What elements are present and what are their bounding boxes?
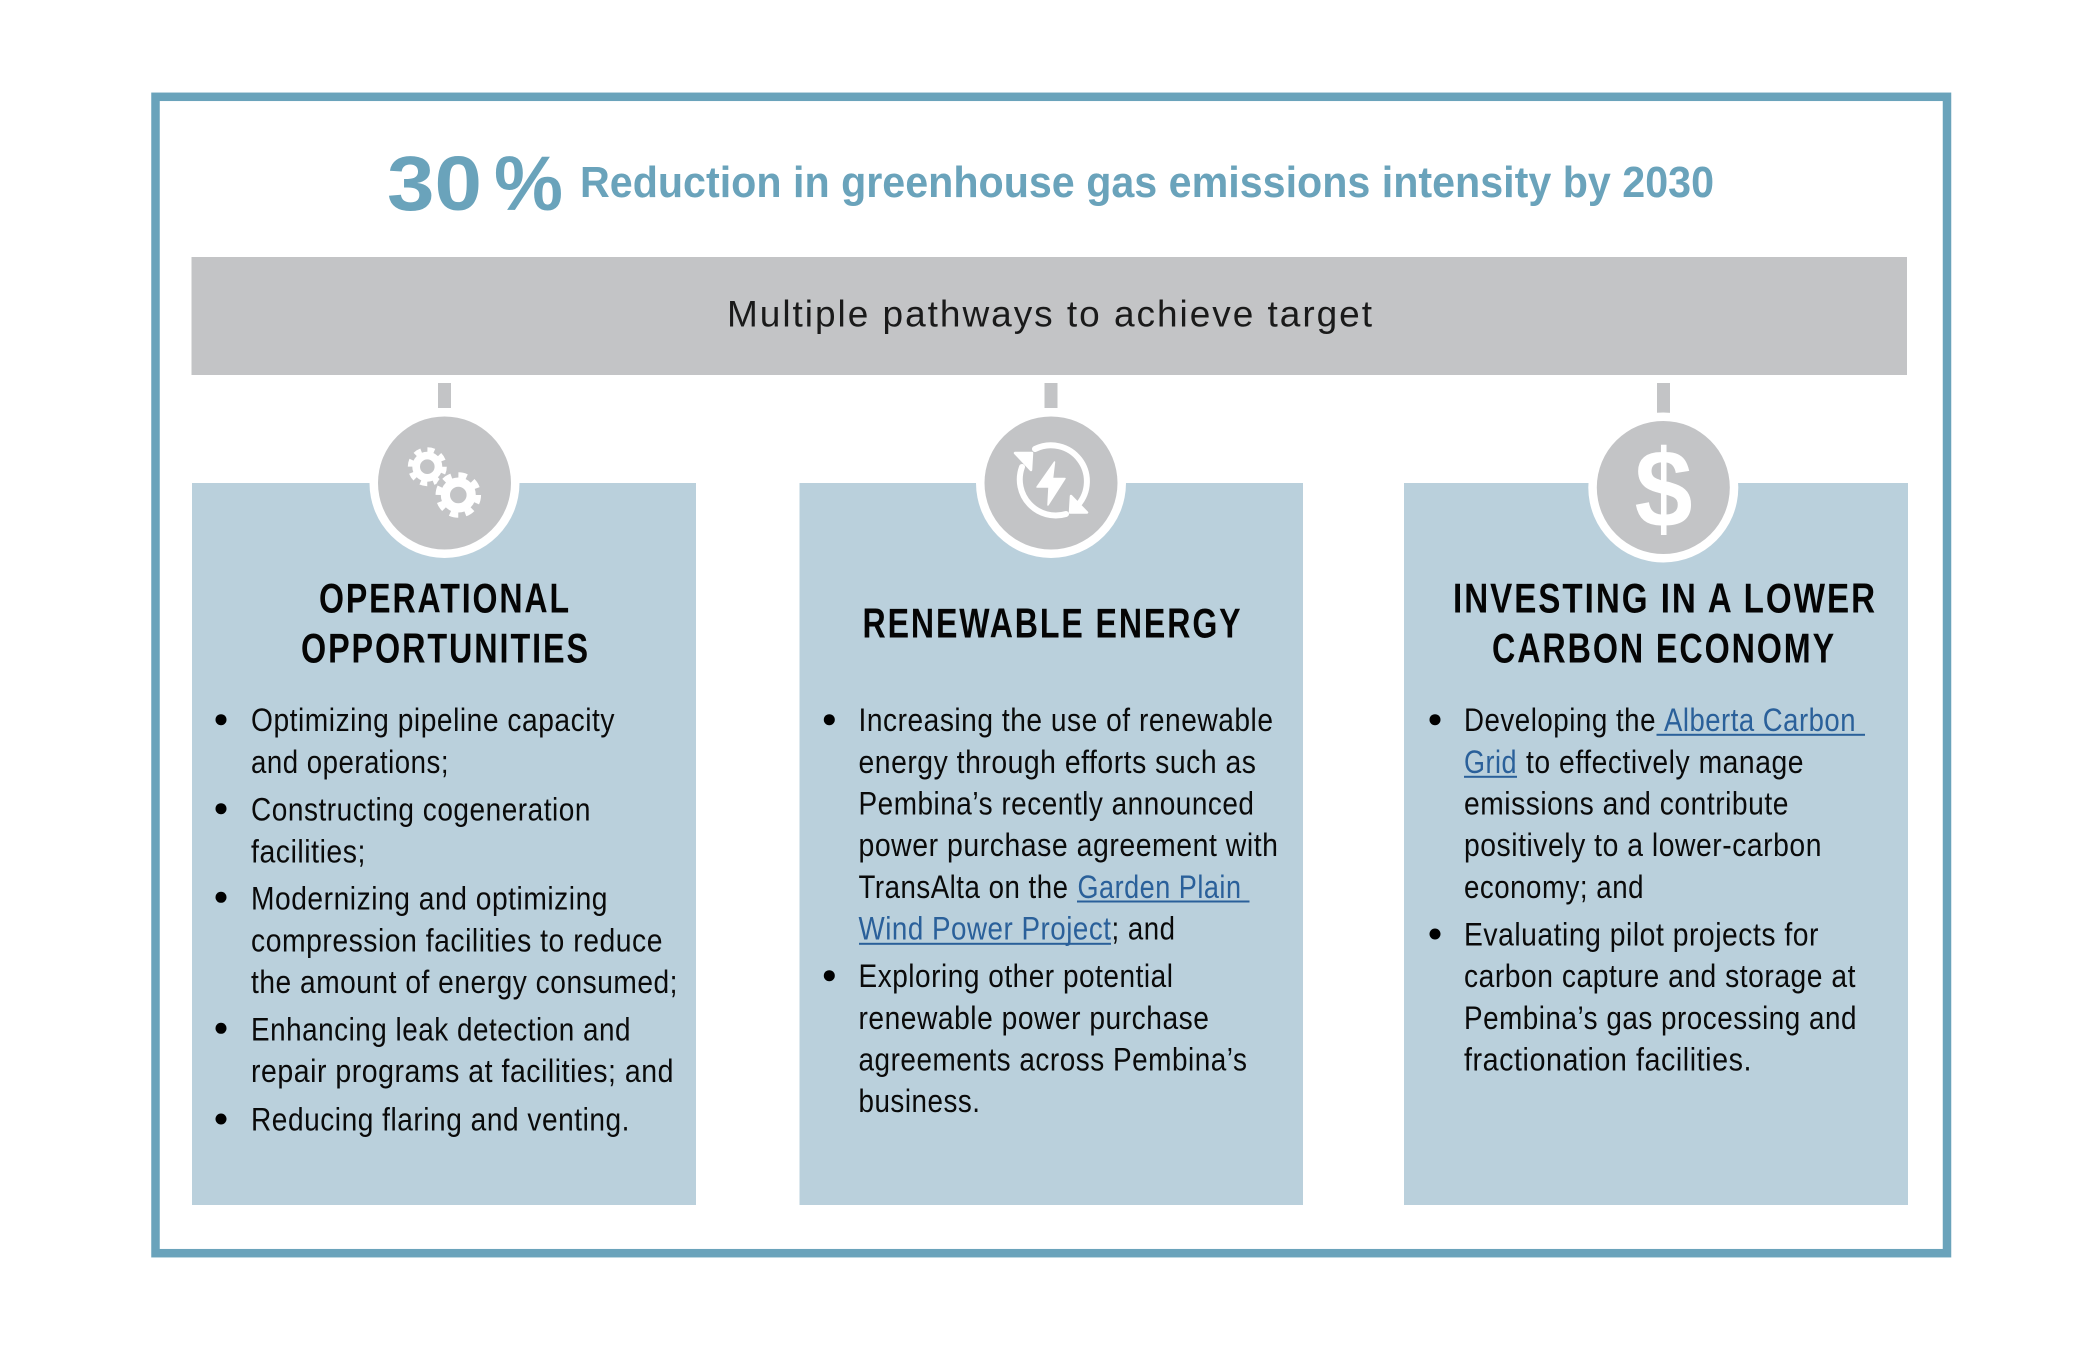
icon: renewable cycle with lightning bolt bbox=[976, 408, 1126, 558]
bullet list: Garden Plain bbox=[1078, 869, 1242, 905]
bullet list bbox=[216, 702, 678, 1138]
outer frame bbox=[156, 97, 1947, 1253]
icon: dollar sign bbox=[1588, 412, 1738, 562]
bullet list: Wind Power Project bbox=[858, 910, 1112, 946]
bullet list: agreements across Pembina’s bbox=[858, 1042, 1248, 1078]
big stat: 30%: % bbox=[494, 141, 563, 227]
banner: multiple pathways: Multiple pathways to achieve target bbox=[727, 294, 1373, 334]
bullet list: facilities; bbox=[251, 834, 366, 870]
bullet list: Pembina’s recently announced bbox=[858, 786, 1254, 822]
bullet list: repair programs at facilities; and bbox=[251, 1053, 674, 1089]
big stat: 30% bbox=[387, 141, 563, 227]
bullet list bbox=[1430, 702, 1865, 1078]
heading: OPPORTUNITIES bbox=[301, 624, 590, 672]
bullet list bbox=[824, 702, 1278, 1119]
bullet list: fractionation facilities. bbox=[1464, 1042, 1752, 1078]
bullet list: TransAlta on the bbox=[858, 869, 1068, 905]
bullet list: carbon capture and storage at bbox=[1464, 958, 1856, 994]
bullet list: Grid bbox=[1464, 744, 1517, 780]
heading bbox=[1453, 574, 1877, 671]
heading: CARBON ECONOMY bbox=[1492, 624, 1836, 671]
title bbox=[387, 141, 1714, 227]
bullet list: Evaluating pilot projects for bbox=[1464, 916, 1819, 952]
bullet list: to effectively manage bbox=[1526, 744, 1804, 780]
bullet list: economy; and bbox=[1464, 869, 1644, 905]
bullet list: compression facilities to reduce bbox=[251, 922, 663, 958]
bullet list: Increasing the use of renewable bbox=[858, 702, 1274, 738]
bullet list: Developing the bbox=[1464, 702, 1656, 738]
panel background bbox=[1404, 483, 1908, 1205]
banner: multiple pathways bbox=[192, 257, 1907, 375]
bullet list: Constructing cogeneration bbox=[251, 792, 591, 828]
bullet list: Alberta Carbon bbox=[1664, 702, 1856, 738]
bullet list: energy through efforts such as bbox=[858, 744, 1256, 780]
heading: OPERATIONAL bbox=[319, 574, 571, 622]
bullet list: renewable power purchase bbox=[858, 1000, 1210, 1036]
icon: dollar sign: $ bbox=[1634, 428, 1692, 551]
connector bbox=[438, 383, 451, 408]
panel: renewable energy bbox=[800, 383, 1303, 1205]
panel background bbox=[192, 483, 696, 1205]
bullet list: Reducing flaring and venting. bbox=[251, 1102, 630, 1138]
bullet list: Exploring other potential bbox=[858, 958, 1174, 994]
panel: operational opportunities bbox=[192, 383, 696, 1205]
bullet list: business. bbox=[858, 1083, 980, 1119]
bullet list: positively to a lower-carbon bbox=[1464, 827, 1822, 863]
bullet list: Modernizing and optimizing bbox=[251, 880, 608, 916]
icon: gears bbox=[370, 408, 520, 558]
heading: RENEWABLE ENERGY bbox=[862, 600, 1242, 647]
panel: investing in a lower carbon economy bbox=[1404, 383, 1908, 1205]
connector bbox=[1657, 383, 1670, 413]
bullet list: power purchase agreement with bbox=[858, 827, 1278, 863]
bullet list: Optimizing pipeline capacity bbox=[251, 702, 615, 738]
connector bbox=[1044, 383, 1058, 408]
heading bbox=[301, 574, 590, 672]
bullet list: Pembina’s gas processing and bbox=[1464, 1000, 1857, 1036]
heading: INVESTING IN A LOWER bbox=[1453, 574, 1877, 621]
panel background bbox=[800, 483, 1303, 1205]
big stat: 30%: 30 bbox=[387, 141, 482, 227]
bullet list: the amount of energy consumed; bbox=[251, 964, 678, 1000]
bullet list: emissions and contribute bbox=[1464, 786, 1789, 822]
bullet list: and operations; bbox=[251, 744, 449, 780]
bullet list: Enhancing leak detection and bbox=[251, 1012, 631, 1048]
title text: Reduction in greenhouse gas emissions intensity by 2030 bbox=[580, 159, 1714, 207]
bullet list: ; and bbox=[1112, 910, 1176, 946]
